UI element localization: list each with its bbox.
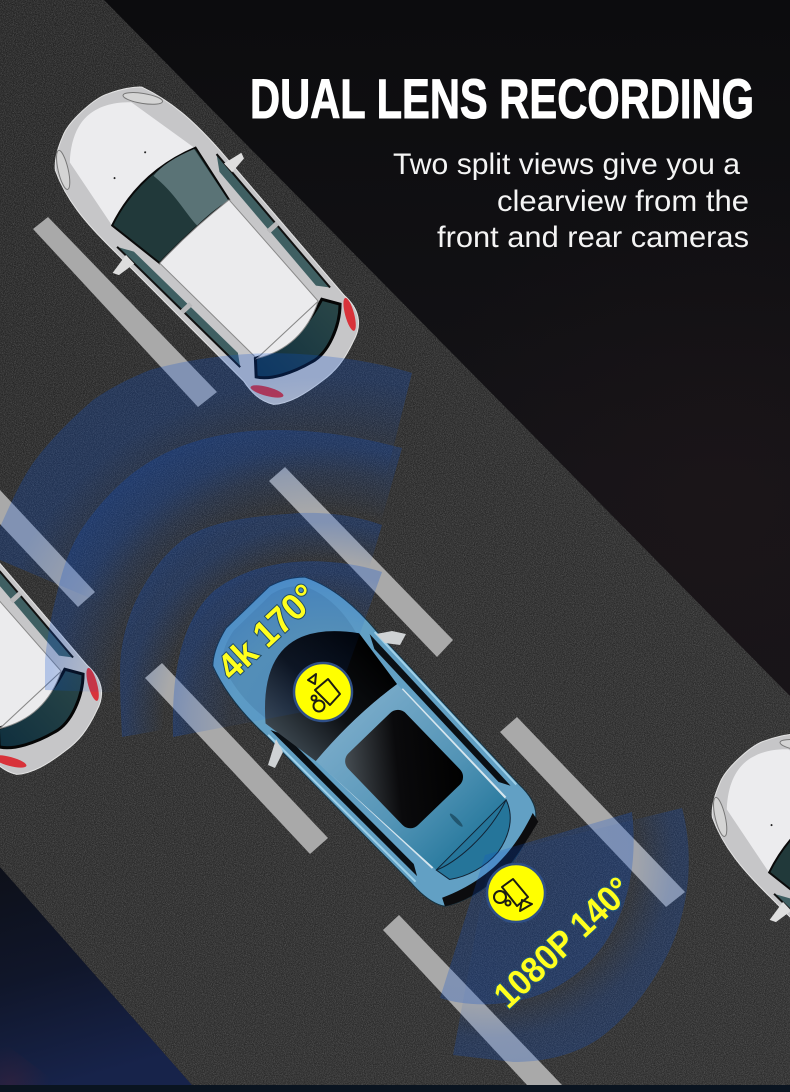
description text <box>393 148 749 254</box>
icon: front camera badge <box>294 663 352 721</box>
bottom-left navy corner <box>0 867 192 1085</box>
car: blue SUV with dash cameras <box>193 554 559 925</box>
description text: front and rear cameras <box>437 221 749 254</box>
label: front camera spec: 4k 170° <box>209 576 325 688</box>
description text: Two split views give you a <box>393 148 740 181</box>
label: rear camera spec: 1080P 140° <box>485 869 639 1016</box>
car: white, top parking bay <box>18 51 393 436</box>
car: white, left edge <box>0 421 136 806</box>
parking lines <box>0 217 685 1085</box>
front camera coverage fans <box>0 353 412 737</box>
description text: clearview from the <box>497 185 749 218</box>
car: white, right edge <box>675 698 790 1083</box>
bottom strip <box>0 1085 790 1092</box>
rear camera coverage fans <box>440 808 689 1062</box>
icon: rear camera badge <box>487 864 545 922</box>
